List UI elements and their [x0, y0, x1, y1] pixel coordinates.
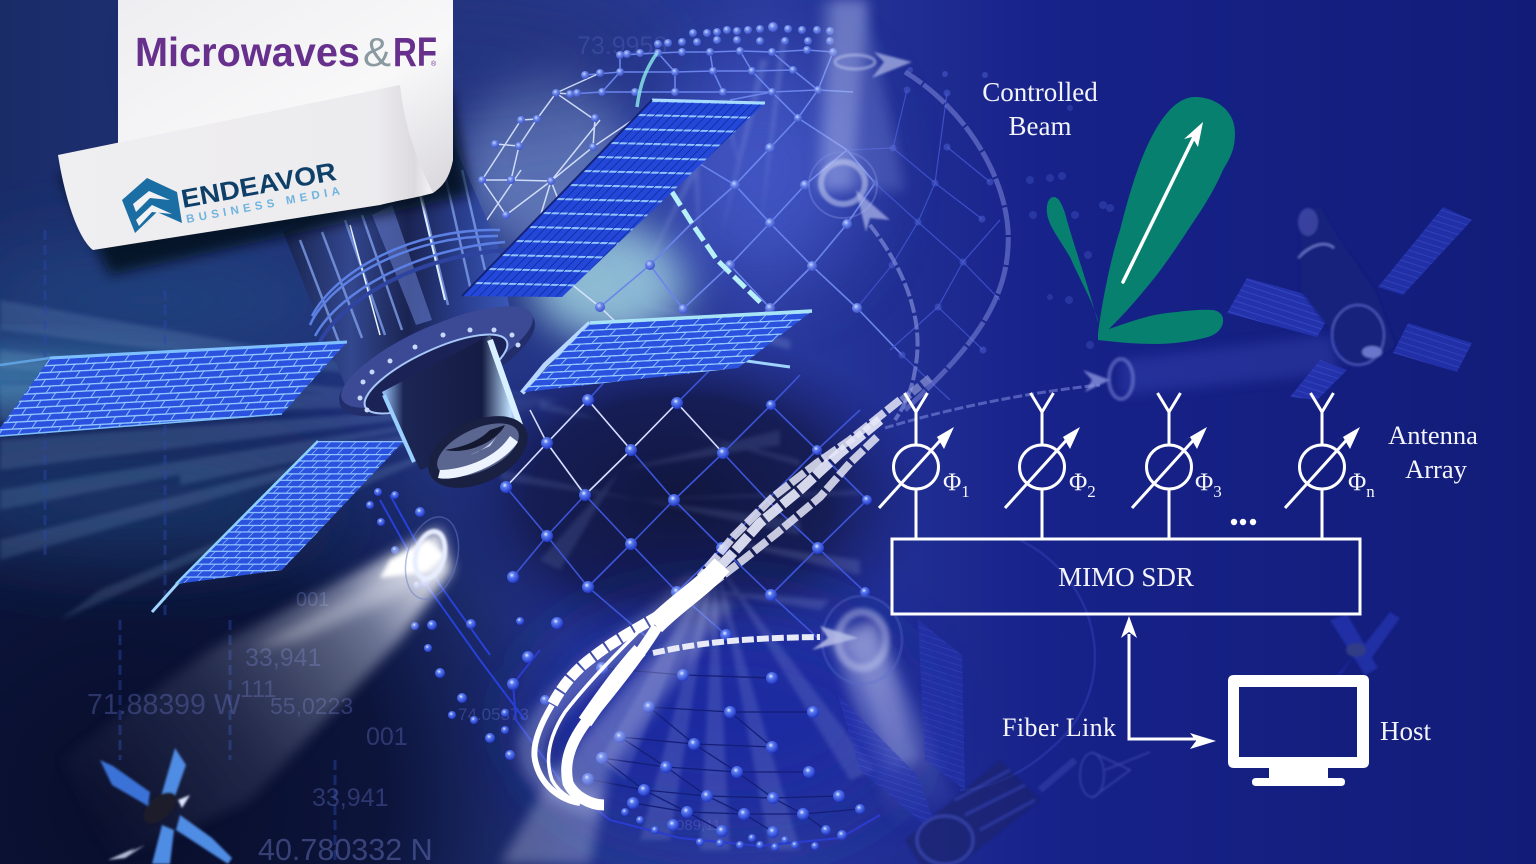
ellipsis dots	[1231, 519, 1256, 525]
faint coordinate numbers: 55,0223	[270, 693, 353, 719]
element n	[1285, 393, 1360, 538]
beam direction arrow	[1123, 122, 1203, 282]
panel left	[1227, 278, 1337, 337]
phase labels: Φ	[943, 469, 961, 496]
sheet	[118, 0, 453, 193]
panel bottom	[1290, 360, 1347, 400]
phase labels: Φ	[1195, 469, 1213, 496]
dashed strands	[700, 400, 900, 583]
thruster beam	[60, 511, 467, 864]
faint coordinate numbers	[87, 32, 721, 864]
faint coordinate numbers: 111	[240, 676, 276, 703]
fiber link label: Fiber Link	[1002, 713, 1116, 742]
left side lobe	[1047, 197, 1098, 322]
mesh nodes: pale dome	[478, 22, 862, 314]
right beam	[1120, 335, 1340, 395]
faint coordinate numbers: 74.05373	[458, 705, 529, 724]
Microwaves and RF logo: RF	[393, 29, 437, 75]
host label: Host	[1380, 716, 1432, 746]
ghost small satellite dish	[1040, 752, 1150, 798]
ghost panel right	[918, 620, 965, 790]
mesh nodes: bright blue	[366, 394, 872, 851]
cylinder body	[283, 147, 510, 385]
fiber link arrows	[1121, 616, 1216, 749]
host monitor icon	[1228, 675, 1369, 786]
solar panel top right	[462, 100, 765, 297]
thruster ring	[410, 528, 450, 582]
panel bottom right	[1393, 323, 1472, 372]
phase labels: Φ	[1069, 469, 1087, 496]
Endeavor Business Media logo	[122, 156, 341, 233]
top beam	[815, 0, 905, 190]
satellite body	[138, 786, 182, 830]
curled flap	[58, 85, 433, 250]
white beam ribbons	[500, 378, 930, 864]
solid white strands	[534, 565, 722, 805]
faint coordinate numbers: 001	[296, 589, 329, 611]
arc: dashed beam to right satellite	[885, 385, 1100, 428]
Microwaves and RF logo: ®	[431, 60, 437, 68]
nozzle	[382, 335, 525, 470]
logo sheet	[58, 0, 470, 275]
ring upper	[835, 55, 875, 69]
faint vertical dashed lines	[45, 230, 335, 864]
controlled beam label	[982, 77, 1098, 141]
branch arrowhead	[812, 626, 858, 650]
ghost panel left	[838, 695, 940, 838]
ghost arcs and dashed beam paths	[637, 53, 1100, 790]
solar panel left	[0, 342, 347, 436]
mesh nodes: faded right side	[872, 67, 1114, 358]
panel arm left	[100, 760, 150, 806]
cylinder rings	[310, 230, 508, 345]
panel arm upper right	[160, 748, 186, 805]
faint coordinate numbers: 73.9958	[577, 32, 667, 60]
ghost small satellite	[1330, 612, 1400, 690]
solar panel lower left	[176, 441, 404, 584]
arrowhead top	[872, 52, 912, 78]
mesh lines: behind main satellite	[480, 73, 640, 345]
body	[1298, 205, 1395, 365]
MIMO SDR box	[892, 539, 1360, 614]
antenna array label	[1388, 420, 1478, 484]
solar panel lower right	[524, 311, 812, 392]
nozzle bell	[417, 402, 539, 502]
phase labels: 3	[1213, 482, 1222, 501]
MIMO SDR box: MIMO SDR	[1058, 562, 1194, 592]
faint coordinate numbers: 089,11	[676, 817, 721, 834]
mesh lines: lower bowl	[380, 495, 880, 846]
mesh lines: faint right dome	[847, 90, 1000, 400]
phase labels	[943, 469, 1375, 501]
dish mesh network	[366, 22, 1114, 851]
mesh lines: central diamonds	[506, 365, 867, 640]
arrowhead mid	[856, 190, 890, 232]
mesh lines: upper dome	[570, 50, 902, 355]
faint coordinate numbers: 33,941	[312, 784, 388, 812]
element 3	[1132, 393, 1207, 538]
faint coordinate numbers: 001	[366, 723, 408, 751]
ghost satellite lower	[838, 620, 1150, 864]
chevron mark	[122, 178, 182, 233]
faint coordinate numbers: 33,941	[245, 644, 321, 672]
Endeavor Business Media logo: BUSINESS MEDIA	[185, 185, 341, 226]
ghost satellite right	[1227, 205, 1472, 400]
phase labels: 1	[961, 482, 970, 501]
antenna array label: Array	[1405, 454, 1468, 484]
ring lower	[821, 162, 865, 204]
sheet shadow	[60, 90, 470, 275]
ghost body	[905, 760, 1040, 864]
element 2	[1005, 393, 1080, 538]
glow	[531, 585, 700, 803]
controlled beam label: Controlled	[982, 77, 1098, 107]
right side lobe	[1098, 310, 1223, 344]
panel top right	[1378, 207, 1472, 295]
element 1	[879, 393, 954, 538]
Microwaves and RF logo: &	[363, 29, 391, 75]
arc: solid faded ring	[905, 72, 1008, 410]
small satellite lower left	[100, 748, 232, 864]
faint coordinate numbers: 71.88399 W	[87, 689, 241, 721]
phase labels: Φ	[1348, 469, 1366, 496]
arc: low ghost loop	[960, 540, 1095, 790]
dashed branch	[653, 637, 820, 653]
arc: cyan dashed on dome	[672, 192, 763, 305]
phase labels: n	[1366, 482, 1375, 501]
right ring	[1109, 359, 1133, 399]
small satellite glints	[108, 795, 190, 860]
main satellite	[0, 100, 812, 612]
ghost beams, rings and arrowheads	[809, 0, 1340, 830]
boom rods	[152, 323, 790, 612]
phase labels: 2	[1087, 482, 1096, 501]
antenna array label: Antenna	[1388, 420, 1478, 450]
panel arm lower right	[176, 815, 232, 864]
arc: dashed lower	[870, 225, 918, 420]
right arrowhead	[1083, 370, 1110, 392]
arc: cyan top	[637, 53, 657, 107]
antenna array and phase shifters	[879, 393, 1360, 538]
lower ghost satellite beam	[830, 620, 955, 830]
Microwaves and RF logo: Microwaves	[135, 29, 360, 75]
controlled beam label: Beam	[1009, 111, 1071, 141]
Endeavor Business Media logo: ENDEAVOR	[179, 156, 339, 214]
main lobe	[1098, 97, 1235, 333]
radiation pattern lobes	[1047, 97, 1235, 344]
panel arm bottom	[152, 825, 174, 864]
collar	[326, 286, 548, 438]
